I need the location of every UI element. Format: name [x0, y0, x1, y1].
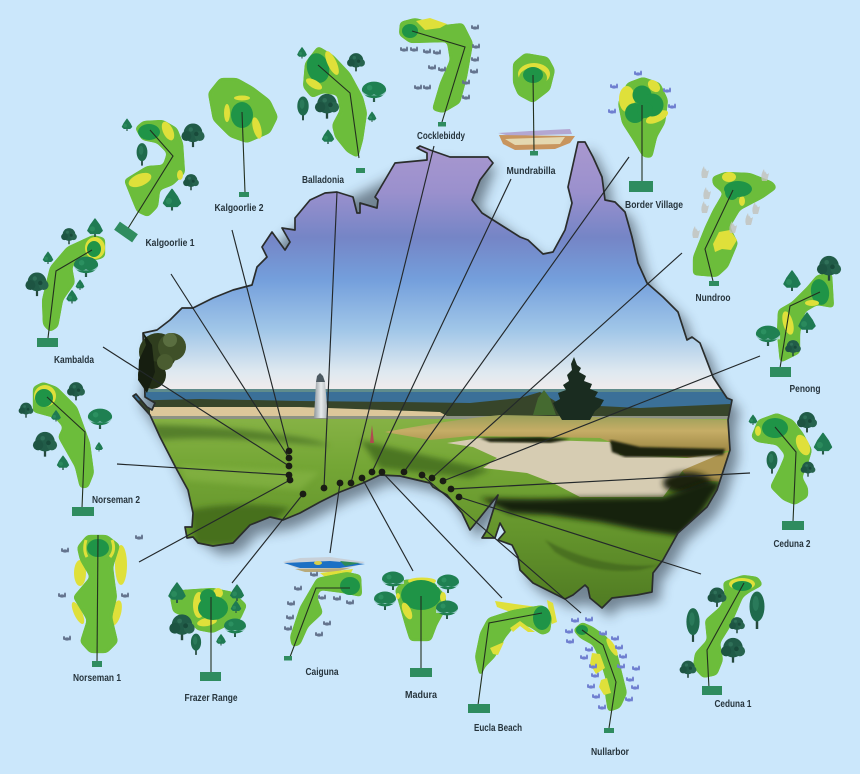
- map of Australia filled with golf course photograph: [120, 140, 740, 619]
- course: Penong: Penong: [790, 383, 820, 395]
- water image: [283, 557, 365, 572]
- course: Caiguna: Caiguna: [306, 666, 339, 678]
- course: Eucla Beach: Eucla Beach: [474, 722, 522, 734]
- course: Madura: Madura: [405, 689, 437, 701]
- water: [134, 392, 731, 408]
- course: Norseman 1: Norseman 1: [73, 672, 121, 684]
- course: Kalgoorlie 1: [114, 119, 205, 249]
- sky: [144, 142, 720, 389]
- leader lines: [103, 146, 760, 613]
- course: Kalgoorlie 1: Kalgoorlie 1: [146, 237, 195, 249]
- bunker shadow top: [480, 437, 570, 443]
- course: Balladonia: Balladonia: [302, 174, 344, 186]
- golden rough: [385, 415, 732, 458]
- course: Ceduna 1: [680, 575, 764, 710]
- cliff image: [498, 129, 575, 150]
- course: Penong: [756, 256, 841, 395]
- course: Frazer Range: [169, 583, 247, 704]
- bunker shadow spot: [663, 472, 711, 494]
- far tree line: [138, 392, 730, 416]
- small green tree: [533, 390, 556, 415]
- map outline: [133, 142, 732, 608]
- tree shadow band: [480, 482, 722, 536]
- sand strip: [150, 407, 446, 416]
- course: Border Village: [608, 70, 683, 211]
- pine tree: [553, 357, 604, 420]
- course: Eucla Beach: [468, 600, 557, 734]
- course: Ceduna 2: Ceduna 2: [774, 538, 811, 550]
- course: Norseman 1: [58, 534, 143, 684]
- course: Ceduna 2: [749, 412, 831, 550]
- course: Kalgoorlie 2: [208, 78, 278, 214]
- course: Cocklebiddy: [399, 18, 480, 142]
- map drop shadow: [141, 151, 740, 617]
- course: Frazer Range: Frazer Range: [184, 692, 238, 704]
- course: Mundrabilla: [498, 53, 575, 177]
- course: Kambalda: [25, 219, 105, 366]
- course: Nundroo: Nundroo: [696, 292, 730, 304]
- course: Mundrabilla: Mundrabilla: [506, 165, 556, 177]
- course: Kambalda: Kambalda: [54, 354, 94, 366]
- course: Kalgoorlie 2: Kalgoorlie 2: [214, 202, 264, 214]
- bunker: [447, 438, 723, 497]
- course location dots: [286, 448, 462, 500]
- course: Ceduna 1: Ceduna 1: [714, 698, 752, 710]
- road: [152, 416, 728, 419]
- distant land: [146, 389, 722, 392]
- course: Nundroo: [692, 166, 777, 304]
- flag: [370, 425, 374, 443]
- course: Cocklebiddy: Cocklebiddy: [417, 130, 465, 142]
- course: Border Village: Border Village: [625, 199, 683, 211]
- course: Madura: [374, 572, 459, 701]
- grass: [152, 419, 729, 607]
- large coastal tree: [138, 332, 186, 393]
- course: Caiguna: [283, 557, 365, 678]
- course: Norseman 2: [19, 382, 140, 516]
- grass shading: [150, 425, 330, 446]
- right rough: [682, 452, 728, 482]
- course: Nullarbor: Nullarbor: [591, 746, 629, 758]
- course: Nullarbor: [565, 616, 640, 758]
- course: Norseman 2: Norseman 2: [92, 494, 140, 506]
- lower grass streak: [545, 540, 660, 571]
- course: Balladonia: [297, 46, 386, 186]
- lighthouse: [314, 382, 328, 418]
